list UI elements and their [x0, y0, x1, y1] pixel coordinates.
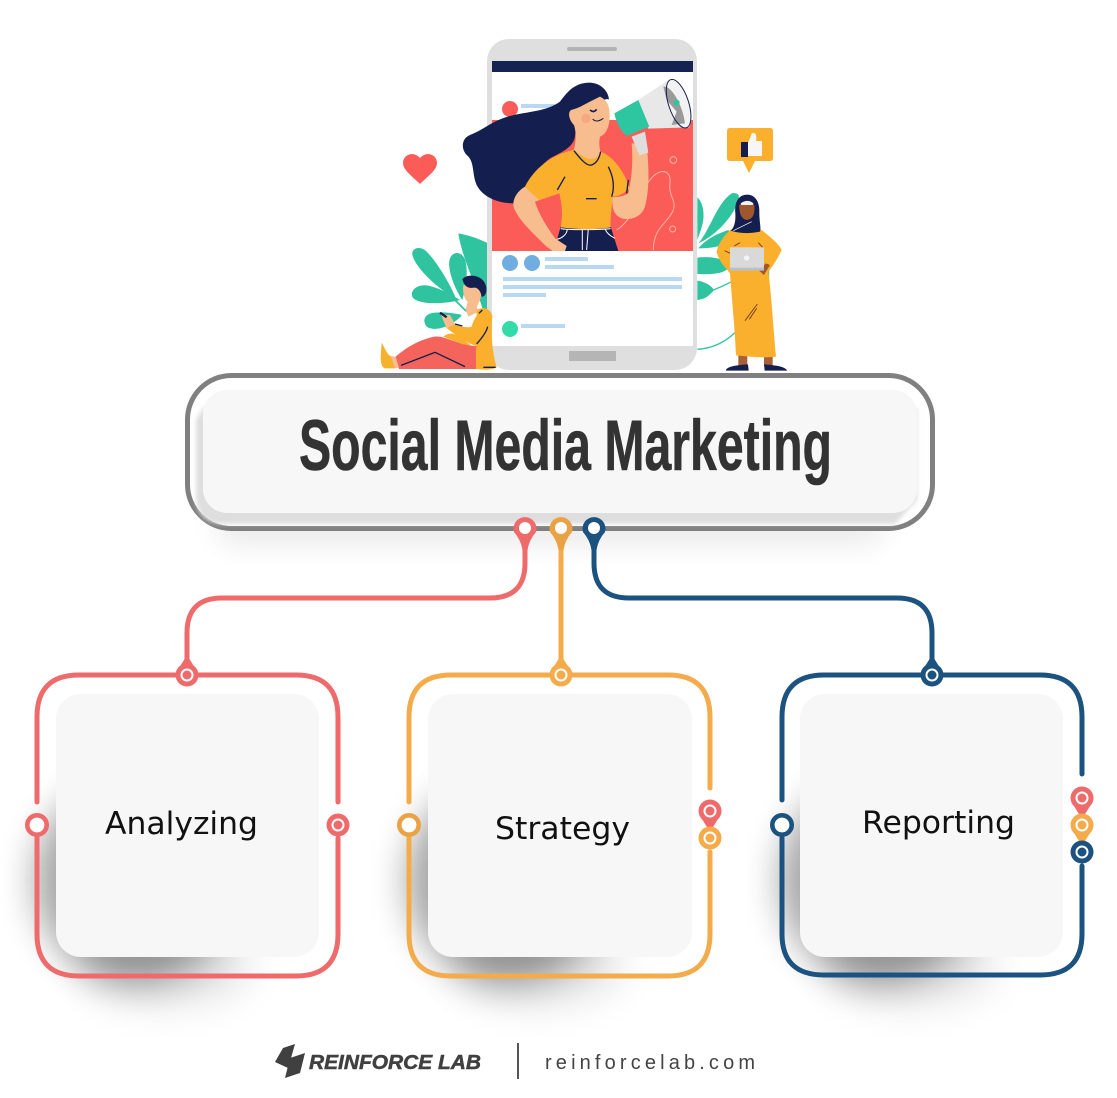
illustration: phone with social media characters: [381, 39, 787, 371]
label: Analyzing: [105, 806, 258, 842]
panel: Reporting: [772, 655, 1094, 1003]
node: orange top: [550, 517, 572, 550]
plant behind woman: [697, 193, 768, 349]
card outline: [37, 675, 338, 976]
node top: [920, 655, 944, 686]
connector: red to Analyzing: [187, 540, 525, 675]
heading: Social Media Marketing: [299, 407, 832, 486]
decorative doodles: [617, 157, 677, 250]
card outline: [782, 675, 1082, 975]
node right: [326, 814, 350, 836]
node top: [550, 655, 572, 686]
website: reinforcelab.com: [545, 1052, 755, 1074]
label: Reporting: [862, 805, 1015, 841]
phone speaker: [567, 47, 617, 51]
post header avatar: [502, 101, 555, 117]
phone body: [487, 39, 697, 370]
node left: [772, 815, 792, 835]
panel: Strategy: [399, 655, 722, 1003]
connector: navy to Reporting: [594, 540, 932, 675]
icon: heart: [403, 154, 437, 184]
node right orange: [1070, 814, 1094, 846]
inner card: [428, 694, 692, 957]
inner card: [56, 694, 319, 957]
node left: [399, 815, 419, 835]
panel: Analyzing: [27, 655, 350, 1003]
connector: orange to Strategy: [558, 540, 564, 675]
node left: [27, 815, 47, 835]
node right navy: [1070, 840, 1094, 864]
card outline: [409, 675, 710, 976]
node right red: [1070, 786, 1094, 819]
comment and text lines: [502, 255, 682, 337]
divider: [517, 1043, 519, 1079]
phone home button: [569, 351, 616, 361]
panel: main title box: [188, 376, 932, 545]
node top: [176, 655, 198, 686]
woman with megaphone: [463, 76, 696, 251]
logo wordmark: REINFORCE LAB: [309, 1052, 481, 1074]
node: navy top: [582, 517, 606, 550]
phone screen: [492, 61, 693, 346]
man sitting with phone: [381, 276, 497, 370]
post image: [492, 120, 693, 251]
plant behind man: [412, 233, 488, 329]
node right orange: [698, 826, 722, 850]
icon: thumbs up bubble: [727, 128, 773, 173]
footer: brand: [275, 1043, 755, 1079]
label: Strategy: [495, 811, 630, 847]
app bar: [492, 61, 693, 72]
node right red: [698, 800, 722, 832]
woman in hijab with laptop: [717, 195, 787, 371]
node: red top: [514, 517, 537, 550]
icon: logo: [275, 1044, 305, 1078]
inner card: [800, 694, 1063, 957]
